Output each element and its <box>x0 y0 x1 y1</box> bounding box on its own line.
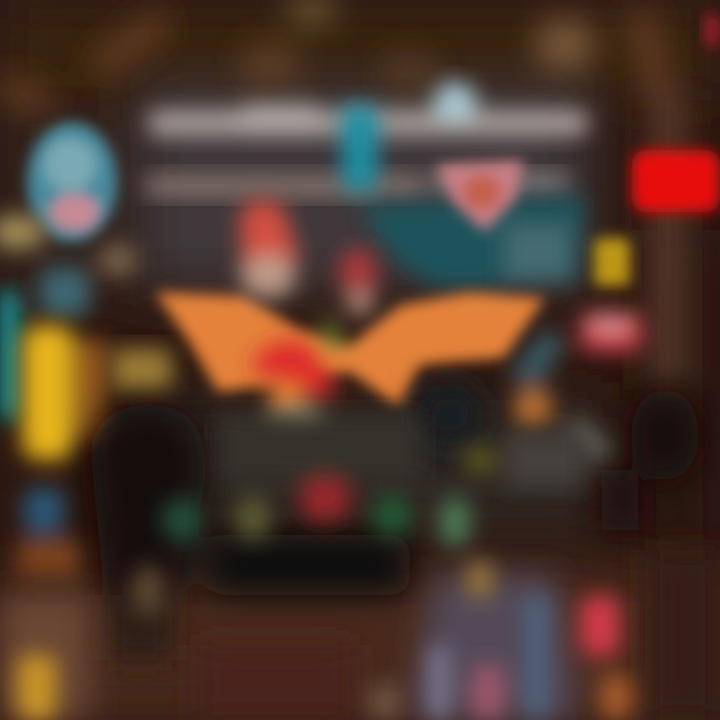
background: wooden beams and warm ceiling lights <box>0 0 686 390</box>
dark crowd silhouettes <box>90 381 699 660</box>
floor light reflections <box>18 560 632 720</box>
right yellow sign <box>594 238 630 286</box>
gnome figures: red hats <box>240 199 378 454</box>
right figure and pink sign <box>508 312 642 468</box>
left small lit window <box>112 348 172 392</box>
sign: pink heart emblem <box>436 160 524 232</box>
right red neon sign <box>632 150 720 212</box>
left signs and lantern <box>0 214 138 420</box>
sign: upper white band <box>148 82 588 136</box>
left round blue sign <box>27 122 117 242</box>
left yellow lit column <box>18 325 106 576</box>
sign: lower grey band <box>145 172 570 198</box>
central cluster of dim coloured lights <box>132 415 585 616</box>
wet street floor reflections <box>0 550 720 720</box>
orange central banner <box>155 292 545 408</box>
sign: teal emblem <box>342 104 585 288</box>
top right red glow <box>704 12 720 48</box>
